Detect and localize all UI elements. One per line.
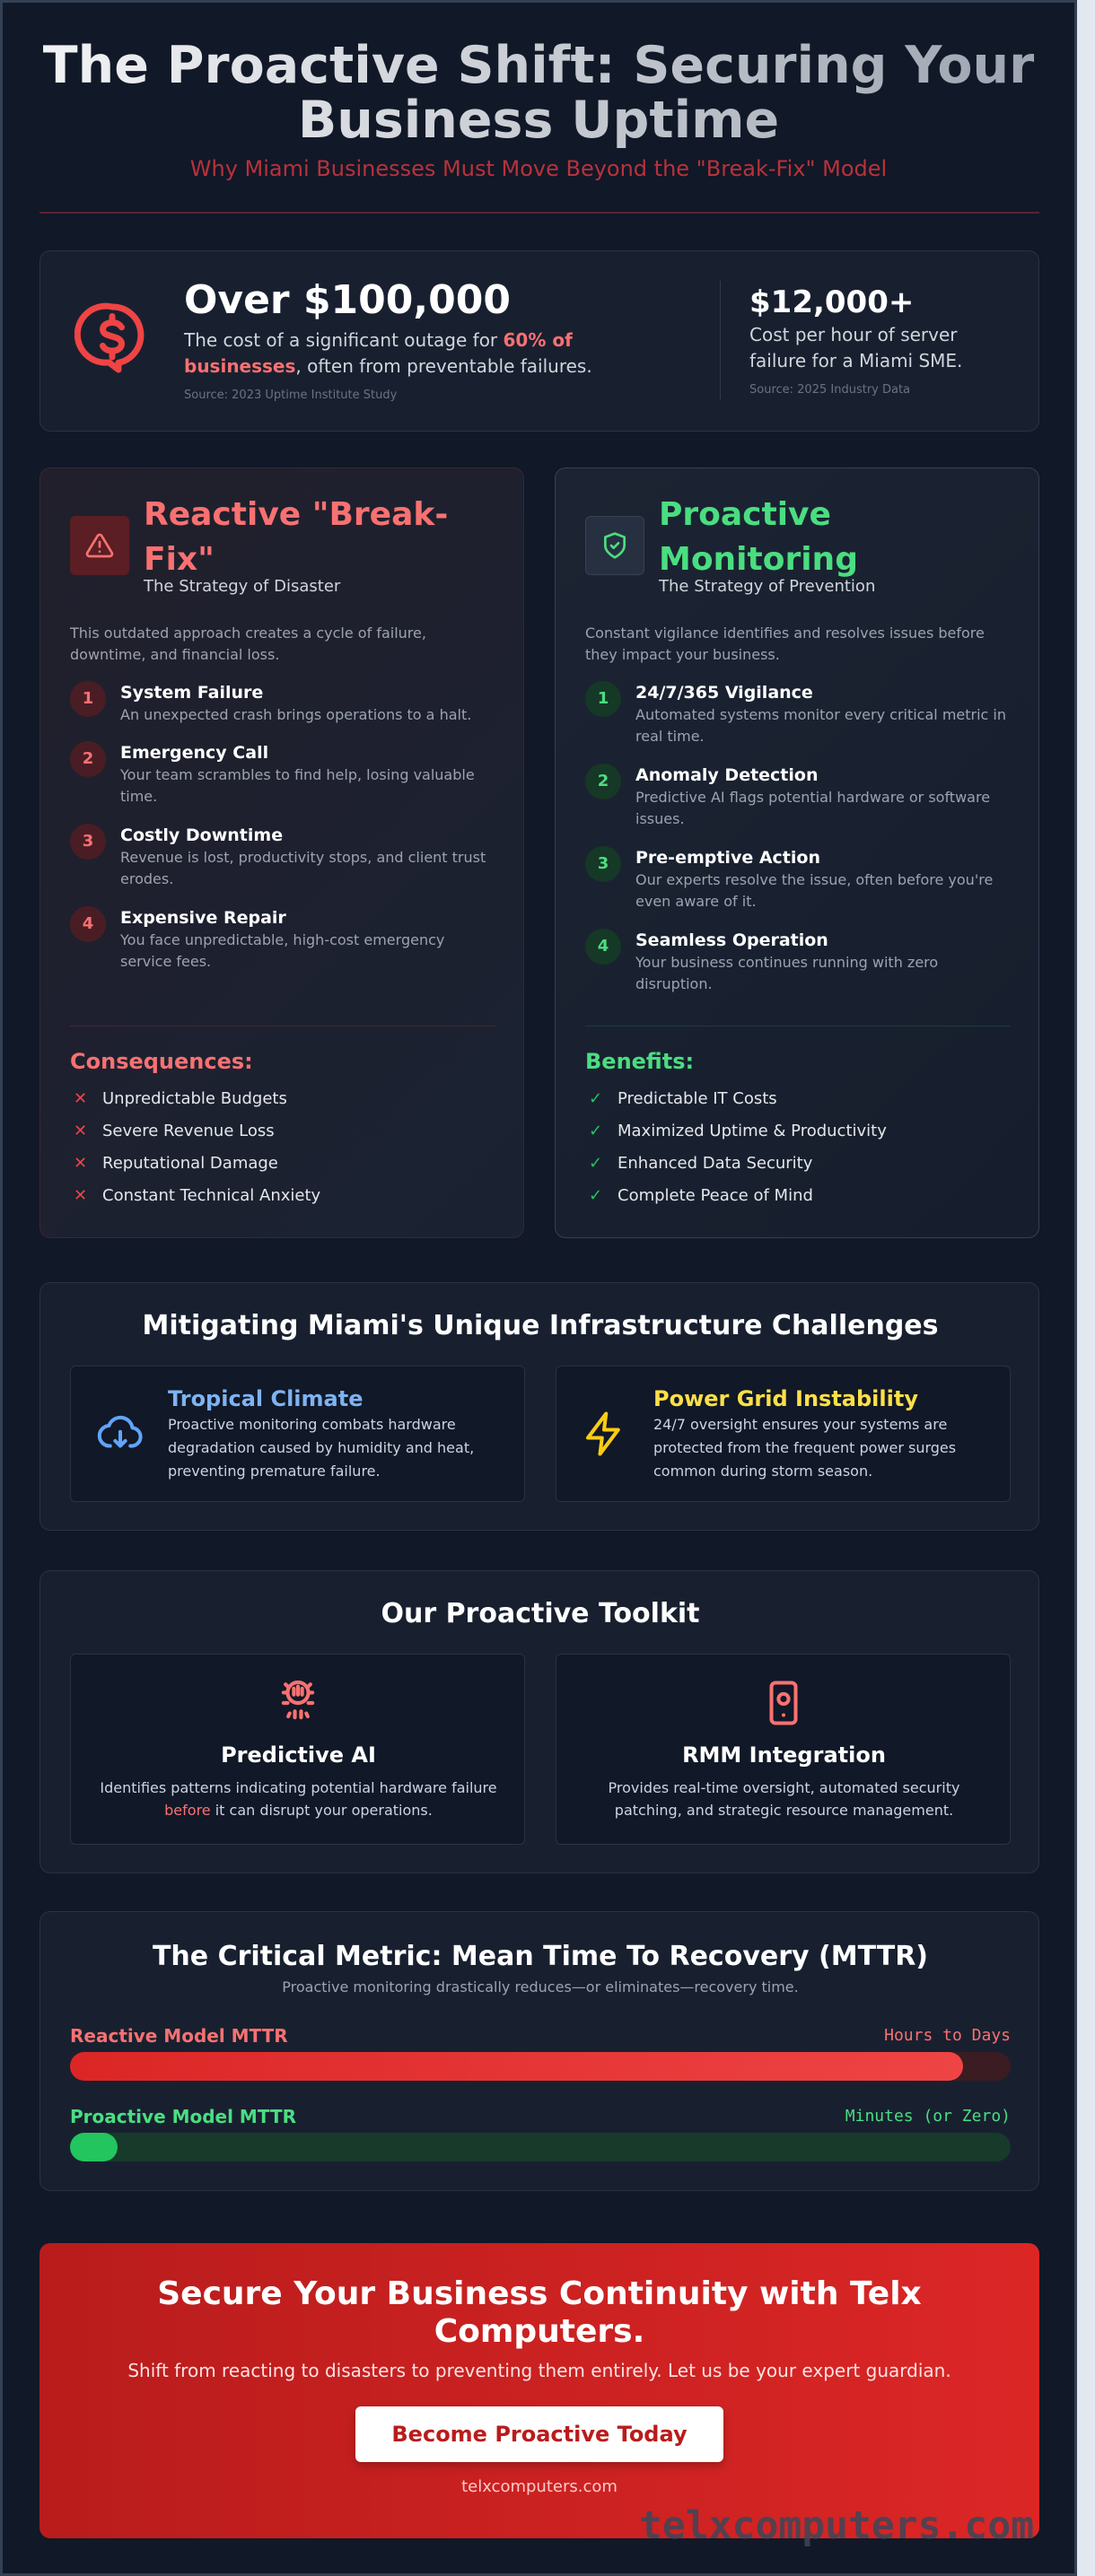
benefits list: ✓ bbox=[589, 1186, 602, 1205]
heading: The Critical Metric: Mean Time To Recovery (MTTR) bbox=[153, 1941, 928, 1972]
watermark: telxcomputers.com bbox=[639, 2503, 1034, 2548]
heading: The Strategy of Disaster bbox=[144, 577, 340, 596]
consequences list: ✕ bbox=[74, 1154, 87, 1173]
card: RMM bbox=[556, 1654, 1011, 1845]
card: power grid: 24/7 oversight ensures your systems are protected from the frequent power surges common during storm season. bbox=[653, 1416, 956, 1480]
bar: proactive: Proactive Model MTTR bbox=[70, 2106, 296, 2127]
icon: dollar bbox=[74, 303, 144, 373]
bar: reactive bbox=[70, 2025, 1011, 2081]
CTA heading: Secure Your Business Continuity with Telx Computers. bbox=[157, 2275, 922, 2350]
stat: 12000: Cost per hour of server failure for a Miami SME. bbox=[749, 324, 962, 371]
card: tropical climate: Tropical Climate bbox=[168, 1386, 363, 1411]
benefits list: Benefits: bbox=[585, 1049, 694, 1074]
benefits list: Enhanced Data Security bbox=[618, 1154, 812, 1173]
steps: Your business continues running with zero disruption. bbox=[635, 954, 938, 992]
consequences list bbox=[70, 1049, 320, 1205]
stat: 12000: $12,000+ bbox=[749, 284, 914, 320]
stat: 100000 bbox=[183, 277, 592, 402]
benefits list: Predictable IT Costs bbox=[618, 1089, 777, 1108]
steps: Our experts resolve the issue, often before you're even aware of it. bbox=[635, 871, 993, 910]
CTA panel bbox=[39, 2243, 1039, 2538]
steps: 2 bbox=[598, 772, 609, 790]
button bbox=[355, 2406, 723, 2462]
card: RMM: RMM Integration bbox=[682, 1742, 886, 1768]
steps: 3 bbox=[598, 854, 609, 873]
heading: Our Proactive Toolkit bbox=[381, 1598, 700, 1629]
panel: proactive bbox=[555, 467, 1039, 1238]
intro: This outdated approach creates a cycle of failure, downtime, and financial loss. bbox=[70, 624, 426, 663]
consequences list: ✕ bbox=[74, 1122, 87, 1140]
panel: MTTR chart bbox=[39, 1911, 1039, 2191]
panel: reactive bbox=[39, 467, 524, 1238]
steps: Seamless Operation bbox=[635, 930, 828, 950]
benefits list: ✓ bbox=[589, 1154, 602, 1173]
card: power grid bbox=[556, 1366, 1011, 1502]
card: power grid: Power Grid Instability bbox=[653, 1386, 918, 1411]
panel: stats bbox=[39, 250, 1039, 432]
panel: toolkit bbox=[39, 1570, 1039, 1873]
benefits list: Maximized Uptime & Productivity bbox=[618, 1122, 887, 1140]
steps: 4 bbox=[83, 914, 93, 933]
steps: 2 bbox=[83, 749, 93, 768]
consequences list: Severe Revenue Loss bbox=[102, 1122, 275, 1140]
steps: Automated systems monitor every critical metric in real time. bbox=[635, 706, 1006, 745]
heading: Mitigating Miami's Unique Infrastructure Challenges bbox=[142, 1310, 939, 1341]
consequences list: Unpredictable Budgets bbox=[102, 1089, 287, 1108]
card: RMM: Provides real-time oversight, automated security patching, and strategic resource management. bbox=[609, 1779, 959, 1819]
steps: 4 bbox=[598, 937, 609, 956]
panel: miami challenges bbox=[39, 1282, 1039, 1531]
title: The Proactive Shift: Securing Your Business Uptime bbox=[43, 36, 1034, 150]
steps: 1 bbox=[83, 689, 93, 708]
steps bbox=[585, 681, 1006, 992]
heading: Proactive Monitoring bbox=[659, 496, 858, 578]
bar: reactive: Hours to Days bbox=[884, 2026, 1011, 2045]
steps: 3 bbox=[83, 832, 93, 851]
steps: Predictive AI flags potential hardware or software issues. bbox=[635, 789, 990, 827]
CTA panel: Shift from reacting to disasters to preventing them entirely. Let us be your expert guardian. bbox=[127, 2360, 951, 2381]
stat: 12000 bbox=[749, 284, 962, 397]
icon: warning bbox=[70, 516, 129, 575]
subtitle: Why Miami Businesses Must Move Beyond the "Break-Fix" Model bbox=[190, 156, 887, 181]
heading: The Strategy of Prevention bbox=[659, 577, 875, 596]
card: predictive AI: Predictive AI bbox=[221, 1742, 376, 1768]
heading: Reactive "Break-Fix" bbox=[144, 496, 448, 578]
steps: Expensive Repair bbox=[120, 908, 286, 928]
steps: Pre-emptive Action bbox=[635, 848, 820, 868]
consequences list: Consequences: bbox=[70, 1049, 253, 1074]
intro: Constant vigilance identifies and resolves issues before they impact your business. bbox=[585, 624, 985, 663]
benefits list: ✓ bbox=[589, 1089, 602, 1108]
benefits list: Complete Peace of Mind bbox=[618, 1186, 813, 1205]
button: Become Proactive Today bbox=[391, 2422, 688, 2447]
benefits list: ✓ bbox=[589, 1122, 602, 1140]
steps: An unexpected crash brings operations to a halt. bbox=[120, 706, 471, 723]
steps: 24/7/365 Vigilance bbox=[635, 683, 813, 703]
steps: Revenue is lost, productivity stops, and client trust erodes. bbox=[120, 849, 486, 887]
card: tropical climate: Proactive monitoring combats hardware degradation caused by humidity and heat, preventing premature failure. bbox=[168, 1416, 474, 1480]
icon: shield bbox=[585, 516, 644, 575]
steps: Emergency Call bbox=[120, 743, 268, 763]
consequences list: Constant Technical Anxiety bbox=[102, 1186, 320, 1205]
stat: 100000: Over $100,000 bbox=[184, 277, 511, 323]
steps: 1 bbox=[598, 689, 609, 708]
stat: 100000: The cost of a significant outage for 60% of businesses, often from preventable failures. bbox=[184, 329, 592, 377]
stat: 100000: Source: 2023 Uptime Institute Study bbox=[184, 389, 397, 402]
steps: System Failure bbox=[120, 683, 263, 703]
steps: You face unpredictable, high-cost emergency service fees. bbox=[120, 931, 444, 970]
card: predictive AI: Identifies patterns indicating potential hardware failure before it can disrupt your operations. bbox=[100, 1779, 497, 1819]
steps: Costly Downtime bbox=[120, 825, 283, 845]
consequences list: ✕ bbox=[74, 1089, 87, 1108]
benefits list bbox=[585, 1049, 887, 1205]
bar: reactive: Reactive Model MTTR bbox=[70, 2025, 288, 2047]
panel: MTTR chart: Proactive monitoring drastically reduces—or eliminates—recovery time. bbox=[282, 1978, 799, 1995]
steps bbox=[70, 681, 486, 970]
CTA panel: telxcomputers.com bbox=[461, 2477, 618, 2496]
consequences list: Reputational Damage bbox=[102, 1154, 278, 1173]
steps: Your team scrambles to find help, losing valuable time. bbox=[120, 766, 475, 805]
bar: proactive: Minutes (or Zero) bbox=[845, 2107, 1011, 2126]
card: predictive AI bbox=[70, 1654, 525, 1845]
steps: Anomaly Detection bbox=[635, 765, 818, 785]
bar: proactive bbox=[70, 2106, 1011, 2161]
consequences list: ✕ bbox=[74, 1186, 87, 1205]
stat: 12000: Source: 2025 Industry Data bbox=[749, 383, 910, 397]
card: tropical climate bbox=[70, 1366, 525, 1502]
